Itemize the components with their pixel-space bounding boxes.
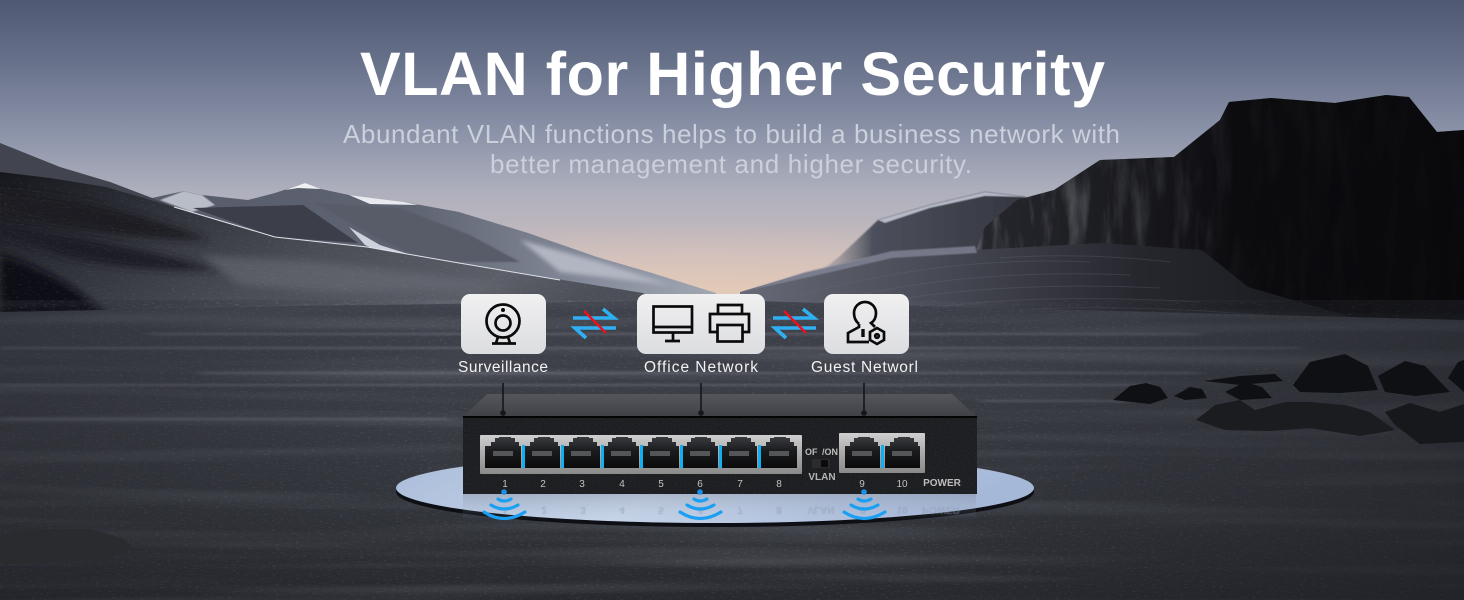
VLAN switch [805,447,838,483]
icon: monitor [654,306,692,341]
POWER label: POWER [923,478,962,489]
port block 9-10 [839,433,925,473]
port numbers: 3 [579,479,585,490]
cliff right [970,90,1464,335]
mirrored port labels: POWER [922,504,961,515]
mirrored port labels: VLAN [807,504,835,515]
VLAN switch: /ON [822,447,838,457]
dune below cliff [740,243,1348,317]
rock bottom left [0,529,135,564]
port numbers: 6 [697,479,703,490]
icon: printer [710,305,749,342]
port numbers: 5 [658,479,664,490]
mirrored port labels: 9 [860,504,866,515]
panel: office network [637,294,765,354]
connector lines [500,383,867,416]
port numbers: 8 [776,479,782,490]
mirrored port labels: 8 [776,504,782,515]
wifi icon port 9 [844,489,885,518]
rocks right [1113,354,1464,444]
arrows: blocked link right [773,309,816,338]
title: VLAN for Higher Security [360,40,1105,108]
mirrored port labels: 10 [896,504,908,515]
sky background [0,0,1464,310]
mirrored port labels: 7 [737,504,743,515]
panel: guest network [824,294,909,354]
switch top face [463,394,977,417]
subtitle: Abundant VLAN functions helps to build a business network with [343,119,1120,149]
port numbers: 7 [737,479,743,490]
mirrored port labels: 3 [580,504,586,515]
mirrored port labels: 1 [502,504,508,515]
subtitle [343,119,1120,179]
port numbers: 9 [859,479,865,490]
mirrored port labels: 6 [698,504,704,515]
icon: webcam [486,304,520,344]
mirrored port labels: 4 [619,504,625,515]
switch front face [463,417,977,494]
distant dunes left [0,143,716,305]
reflective disc platform [396,453,1034,527]
mirrored port labels [502,504,961,515]
front dune left [0,172,645,312]
wifi icon port 1 [484,489,525,518]
label: guest network: Guest Networl [811,359,918,376]
subtitle: better management and higher security. [490,149,972,179]
wifi icon port 6 [680,489,721,518]
panel: surveillance [461,294,546,354]
port block 1-8 [480,435,802,474]
VLAN switch: VLAN [808,472,836,483]
distant mountain right [822,192,1026,275]
port numbers: 4 [619,479,625,490]
network switch [463,394,977,494]
ground plain [0,300,1464,600]
port numbers: 1 [502,479,508,490]
arrows: blocked link left [573,309,616,338]
port numbers: 10 [896,479,908,490]
mirrored port labels: 2 [541,504,547,515]
label: surveillance: Surveillance [458,359,548,376]
port numbers: 2 [540,479,546,490]
label: office network: Office Network [644,359,758,376]
icon: guest user [848,302,884,344]
VLAN switch: OF [805,447,818,457]
port numbers [502,479,908,490]
mirrored port labels: 5 [658,504,664,515]
